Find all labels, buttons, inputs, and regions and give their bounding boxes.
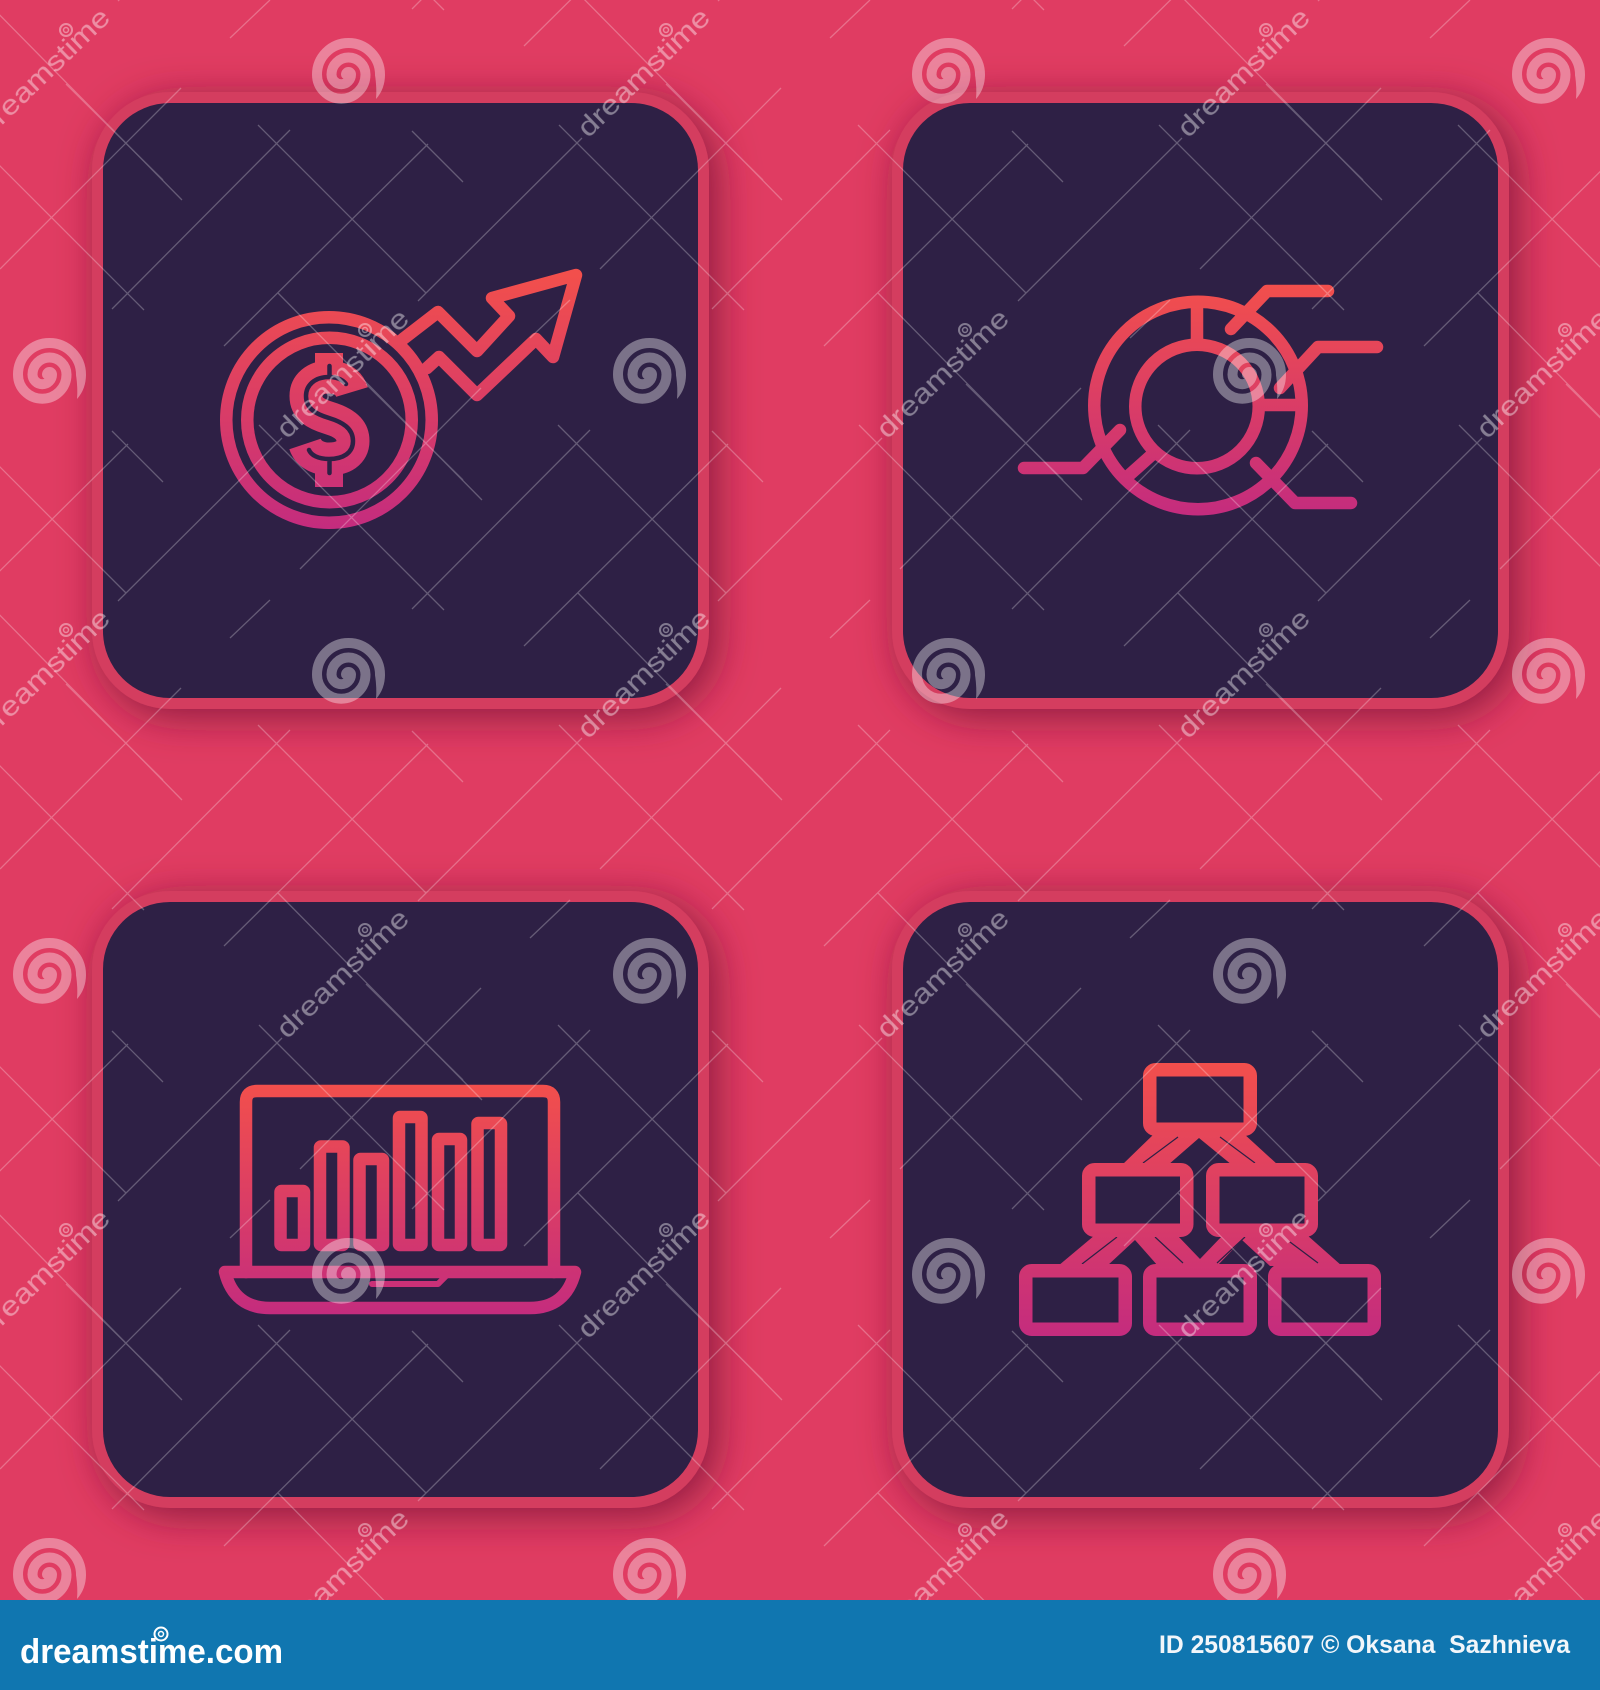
panel: hierarchy card [892,891,1509,1508]
dollar sign body [305,377,353,459]
icon: hierarchy diagram [1026,1070,1374,1329]
watermark: dreamstime text: dreamstime [571,1,716,143]
watermark: dreamstime text: dreamstime [870,1502,1015,1644]
panel: pie diagram card [892,92,1509,709]
watermark: dreamstime text: dreamstime [870,902,1015,1044]
icon: laptop with bar chart [225,1091,575,1308]
icon: donut chart with callouts [1024,291,1377,509]
dollar sign inner channel [306,366,353,473]
watermark: dreamstime text: dreamstime [1470,1502,1600,1644]
watermark: dreamstime text: dreamstime [870,302,1015,444]
dollar sign stubs [315,353,343,487]
watermark: dreamstime text: dreamstime [1470,902,1600,1044]
watermark: dreamstime text: dreamstime [571,602,716,744]
watermark: dreamstime text: dreamstime [1470,302,1600,444]
footer band [0,1600,1600,1690]
panel: laptop chart card [92,891,709,1508]
connectors [1058,1133,1342,1266]
icon: dollar coin with rising arrow [226,275,576,523]
watermark: dreamstime text: dreamstime [1171,1,1316,143]
watermark: dreamstime text: dreamstime [270,302,415,444]
footer credit: ID 250815607 © Oksana Sazhnieva [1159,1631,1571,1659]
watermark: dreamstime text: dreamstime [270,902,415,1044]
boxes [1026,1070,1374,1329]
watermark: dreamstime text: dreamstime [1171,1202,1316,1344]
footer logo: dreamstime.com [20,1633,283,1671]
panel: dollar growth card [92,92,709,709]
watermark: dreamstime text: dreamstime [1171,602,1316,744]
watermark: dreamstime text: dreamstime [571,1202,716,1344]
watermark: dreamstime text: dreamstime [270,1502,415,1644]
